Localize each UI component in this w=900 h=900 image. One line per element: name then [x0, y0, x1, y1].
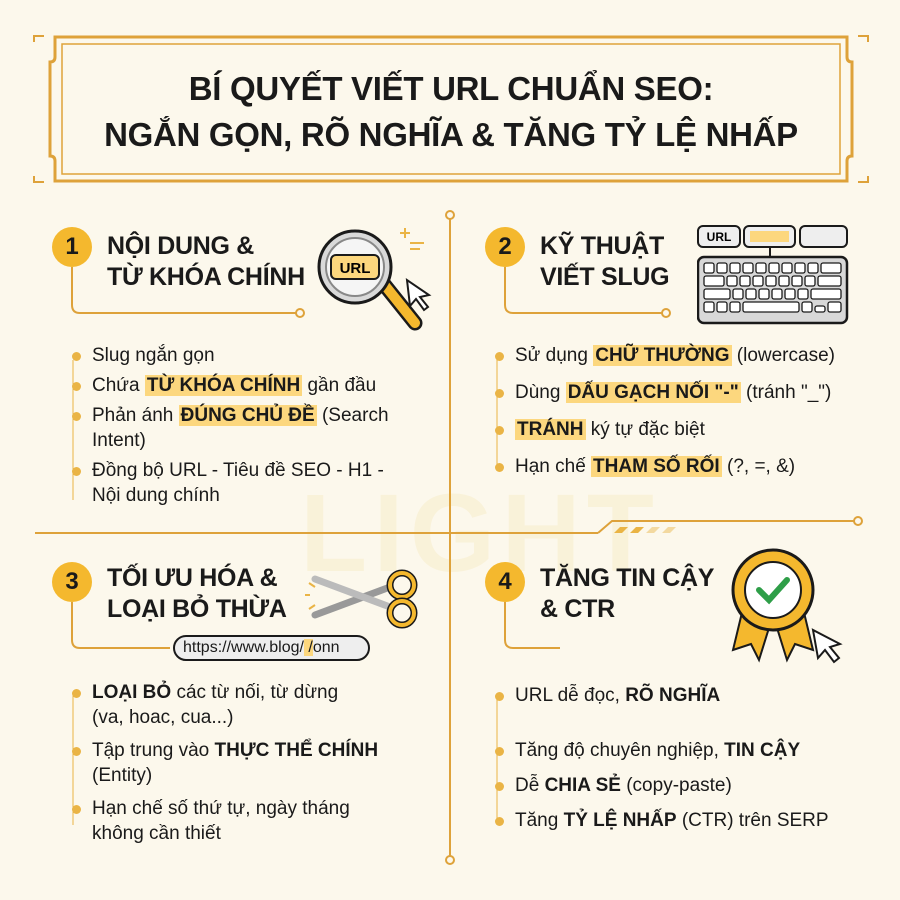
- bullets 2: Dùng DẤU GẠCH NỐI "-" (tránh "_"): [515, 382, 831, 403]
- bullets 2: [495, 344, 835, 477]
- number 1: [52, 227, 92, 267]
- title: NGẮN GỌN, RÕ NGHĨA & TĂNG TỶ LỆ NHẤP: [104, 116, 798, 153]
- bullets 1: Nội dung chính: [92, 485, 220, 506]
- heading 3: [107, 563, 287, 623]
- bullets 3: Tập trung vào THỰC THỂ CHÍNH: [92, 740, 378, 761]
- bullets 3: (Entity): [92, 765, 152, 786]
- bullets 1: Đồng bộ URL - Tiêu đề SEO - H1 -: [92, 460, 384, 481]
- bullets 2: TRÁNH ký tự đặc biệt: [517, 419, 705, 440]
- number 2: [485, 227, 525, 267]
- panel 1: [52, 227, 432, 506]
- heading 4: [540, 564, 714, 623]
- panel 4: [485, 548, 842, 831]
- icon: keyboard: [697, 225, 848, 324]
- bullets 1: Phản ánh ĐÚNG CHỦ ĐỀ (Search Intent): [92, 405, 389, 451]
- icon: magnifier URL: URL: [340, 260, 370, 277]
- heading 4: TĂNG TIN CẬY: [540, 564, 714, 592]
- heading 2: KỸ THUẬT: [540, 232, 664, 260]
- url pill: [173, 635, 370, 661]
- heading 3: TỐI ƯU HÓA &: [107, 564, 277, 592]
- heading 1: NỘI DUNG &: [107, 232, 254, 260]
- icon: scissors: [305, 570, 418, 628]
- icon: badge: [732, 548, 842, 664]
- number 1: 1: [65, 233, 79, 260]
- icon: magnifier URL: [318, 228, 432, 330]
- bullets 1: [72, 344, 389, 506]
- heading 4: & CTR: [540, 595, 615, 623]
- panel 2: [485, 225, 848, 477]
- title: [104, 70, 798, 153]
- bullets 2: Hạn chế THAM SỐ RỐI (?, =, &): [515, 456, 795, 477]
- bullets 4: URL dễ đọc, RÕ NGHĨA: [515, 685, 720, 706]
- bullets 3: LOẠI BỎ các từ nối, từ dừng: [92, 682, 338, 703]
- bullets 4: Tăng TỶ LỆ NHẤP (CTR) trên SERP: [515, 810, 829, 831]
- bullets 2: Sử dụng CHỮ THƯỜNG (lowercase): [515, 345, 835, 366]
- heading 3: LOẠI BỎ THỪA: [107, 595, 287, 623]
- bullets 3: không cần thiết: [92, 823, 221, 844]
- heading 1: [107, 231, 305, 291]
- title: BÍ QUYẾT VIẾT URL CHUẨN SEO:: [189, 70, 713, 107]
- number 3: [52, 562, 92, 602]
- watermark: LIGHT: [300, 472, 660, 595]
- heading 2: [540, 232, 669, 291]
- number 2: 2: [498, 233, 512, 260]
- heading 1: TỪ KHÓA CHÍNH: [107, 263, 305, 291]
- heading 2: VIẾT SLUG: [540, 263, 669, 291]
- bullets 4: [495, 684, 829, 831]
- bullets 4: Dễ CHIA SẺ (copy-paste): [515, 775, 732, 796]
- number 4: 4: [498, 568, 512, 595]
- url pill: https://www.blog/ /onn: [183, 639, 340, 656]
- number 3: 3: [65, 568, 79, 595]
- number 4: [485, 562, 525, 602]
- bullets 1: Chứa TỪ KHÓA CHÍNH gần đầu: [92, 375, 376, 396]
- panel 3: [52, 562, 418, 844]
- bullets 3: Hạn chế số thứ tự, ngày tháng: [92, 798, 350, 819]
- header frame: [33, 35, 869, 183]
- bullets 3: [72, 680, 378, 844]
- bullets 4: Tăng độ chuyên nghiệp, TIN CẬY: [515, 740, 800, 761]
- bullets 3: (va, hoac, cua...): [92, 707, 234, 728]
- icon: keyboard: URL: [707, 230, 731, 244]
- bullets 1: Slug ngắn gọn: [92, 345, 215, 366]
- connectors: [72, 267, 296, 313]
